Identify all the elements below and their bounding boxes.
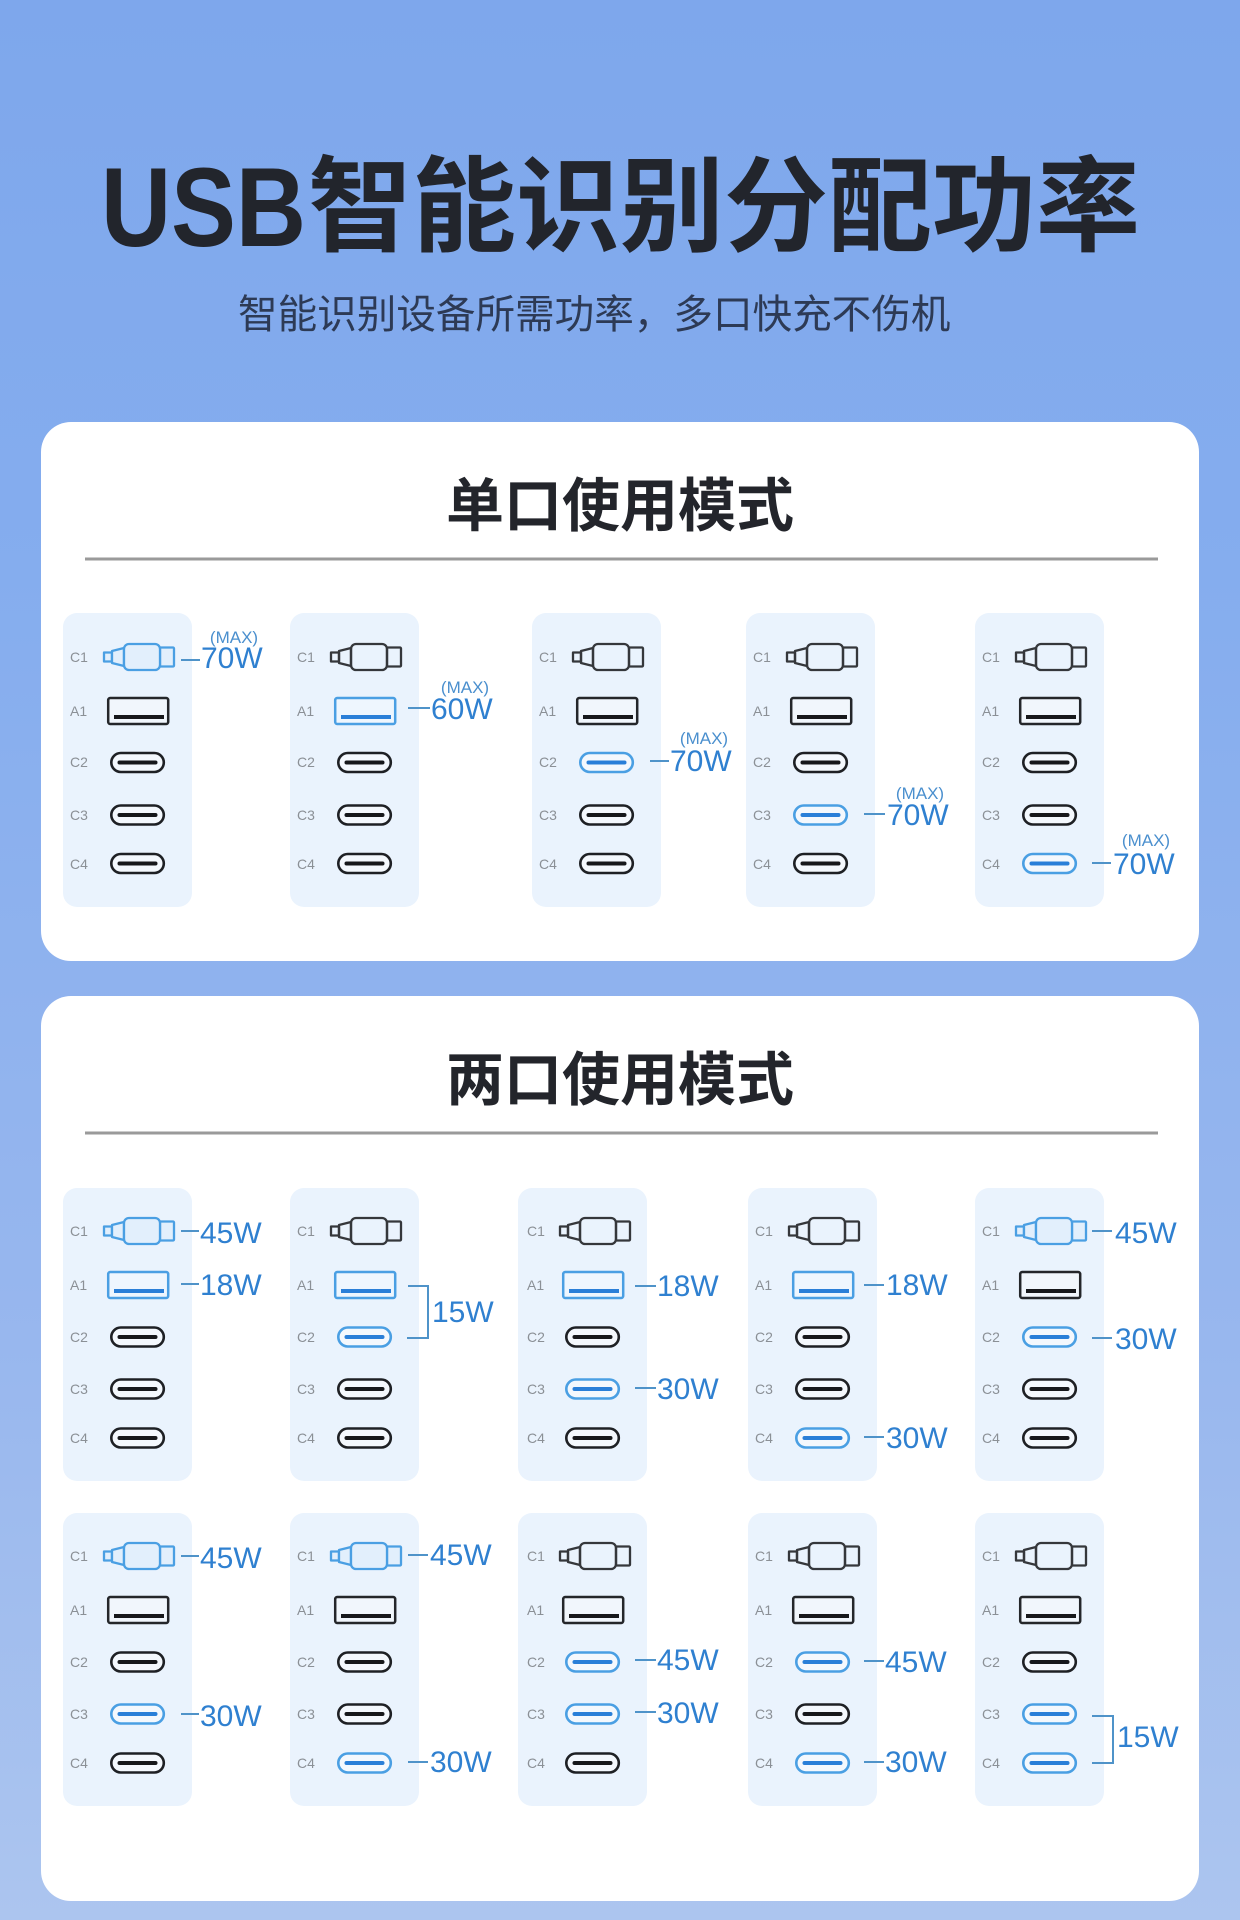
- icon: C4: [794, 854, 847, 873]
- port names: C1: [70, 1223, 88, 1239]
- icon: C3: [796, 1704, 849, 1724]
- port names: C3: [982, 1381, 1000, 1397]
- icon: C1 active: [104, 1218, 174, 1244]
- icon: C3: [111, 806, 164, 824]
- port panel: C3 70W: [746, 613, 949, 907]
- port names: A1: [297, 1602, 314, 1618]
- icon: C3: [338, 1704, 391, 1724]
- port names: C4: [982, 1755, 1000, 1771]
- port names: C3: [982, 807, 1000, 823]
- power label: 45W: 45W: [430, 1539, 492, 1572]
- port names: C3: [527, 1381, 545, 1397]
- port names: C2: [297, 1329, 315, 1345]
- port panel: C3 + C4 15W: [975, 1513, 1179, 1806]
- icon: C2: [1023, 753, 1076, 772]
- power label: 60W max: 60W: [431, 693, 493, 726]
- divider under heading: [85, 558, 1158, 560]
- icon: C4: [111, 1754, 164, 1772]
- port names: C2: [527, 1654, 545, 1670]
- icon: A1 active: [563, 1272, 623, 1298]
- icon: C4 active: [796, 1428, 849, 1448]
- icon: A1: [1020, 1597, 1080, 1623]
- icon: C2: [338, 753, 391, 772]
- port panel: C2 70W: [532, 613, 732, 907]
- power label: 18W: 18W: [657, 1270, 719, 1303]
- power label: 45W: 45W: [1115, 1217, 1177, 1250]
- port names: A1: [70, 703, 87, 719]
- port names: A1: [70, 1602, 87, 1618]
- port names: A1: [982, 703, 999, 719]
- power label: 70W max: [650, 729, 732, 778]
- port names: C2: [982, 1329, 1000, 1345]
- icon: C2: [796, 1328, 849, 1346]
- port names: C3: [70, 807, 88, 823]
- icon: C1: [331, 644, 401, 670]
- icon: C2: [566, 1328, 619, 1346]
- port panel: A1 18W + C4 30W: [748, 1188, 948, 1481]
- port names: C1: [70, 649, 88, 665]
- icon: A1: [1020, 1272, 1080, 1298]
- power label: 70W max: [864, 784, 949, 832]
- port names: C2: [70, 754, 88, 770]
- port names: C4: [297, 856, 315, 872]
- icon: A1: [1020, 698, 1080, 724]
- icon: C3: [338, 806, 391, 824]
- port names: A1: [70, 1277, 87, 1293]
- icon: C2: [1023, 1652, 1076, 1672]
- icon: C1: [560, 1218, 630, 1244]
- icon: C3: [1023, 1380, 1076, 1398]
- port names: C1: [982, 1548, 1000, 1564]
- port panel: A1 + C2 15W: [290, 1188, 494, 1481]
- power label: shared 15W: 15W: [1117, 1721, 1179, 1754]
- subtitle: 智能识别设备所需功率，多口快充不伤机: [238, 293, 950, 337]
- port names: C1: [753, 649, 771, 665]
- icon: C4 active: [338, 1754, 391, 1772]
- port names: C4: [539, 856, 557, 872]
- icon: C1 active: [104, 644, 174, 670]
- port names: C4: [70, 1430, 88, 1446]
- port names: C1: [755, 1223, 773, 1239]
- power label: 70W max: [1092, 831, 1175, 881]
- port names: C3: [70, 1706, 88, 1722]
- port names: C1: [70, 1548, 88, 1564]
- port names: C2: [753, 754, 771, 770]
- power label: 70W max: (MAX): [210, 628, 258, 647]
- icon: C2: [794, 753, 847, 772]
- icon: C1: [573, 644, 643, 670]
- icon: C3: [580, 806, 633, 824]
- icon: A1: [335, 1597, 395, 1623]
- port panel: C4 70W: [975, 613, 1175, 907]
- port names: A1: [297, 1277, 314, 1293]
- port names: C1: [755, 1548, 773, 1564]
- port names: C1: [982, 1223, 1000, 1239]
- icon: C1 active: [331, 1543, 401, 1569]
- port panel: C1 70W: [63, 613, 263, 907]
- port names: C4: [755, 1755, 773, 1771]
- panel: two port mode card: [41, 996, 1199, 1901]
- icon: A1 active: [793, 1272, 853, 1298]
- port panel: A1 18W + C3 30W: [518, 1188, 719, 1481]
- power label: 30W: 30W: [886, 1422, 948, 1455]
- icon: C4: [1023, 1428, 1076, 1448]
- power label: shared 15W: [407, 1286, 494, 1338]
- port names: C1: [527, 1223, 545, 1239]
- power label: 45W: 45W: [657, 1644, 719, 1677]
- power label: 70W max: 70W: [1113, 848, 1175, 881]
- port names: C2: [297, 754, 315, 770]
- port names: C4: [753, 856, 771, 872]
- icon: C3 active: [1023, 1704, 1076, 1724]
- port names: C4: [982, 856, 1000, 872]
- port names: A1: [527, 1602, 544, 1618]
- port names: C3: [527, 1706, 545, 1722]
- panel: single port mode card: [41, 422, 1199, 961]
- port names: A1: [755, 1277, 772, 1293]
- power label: 60W max: (MAX): [441, 678, 489, 697]
- title: USB: [101, 145, 306, 270]
- port names: C4: [982, 1430, 1000, 1446]
- port panel: C1 45W + C3 30W: [63, 1513, 262, 1806]
- icon: C3 active: [111, 1704, 164, 1724]
- port names: C1: [297, 1548, 315, 1564]
- heading: single port mode: 单口使用模式: [446, 474, 794, 539]
- port names: C2: [755, 1329, 773, 1345]
- icon: C2: [111, 1652, 164, 1672]
- port panel: C2 45W + C4 30W: [748, 1513, 947, 1806]
- port names: C1: [297, 649, 315, 665]
- icon: C1: [1016, 1543, 1086, 1569]
- icon: C2 active: [580, 753, 633, 772]
- heading: two port mode: 两口使用模式: [446, 1048, 794, 1113]
- port names: C1: [527, 1548, 545, 1564]
- port names: A1: [297, 703, 314, 719]
- port names: C4: [297, 1755, 315, 1771]
- icon: C2 active: [566, 1652, 619, 1672]
- icon: A1: [108, 698, 168, 724]
- icon: C3: [338, 1380, 391, 1398]
- port names: A1: [753, 703, 770, 719]
- port panel: C1 45W + A1 18W: [63, 1188, 262, 1481]
- power label: shared 15W: 15W: [432, 1296, 494, 1329]
- port names: C2: [982, 754, 1000, 770]
- power label: 45W: 45W: [200, 1542, 262, 1575]
- port names: A1: [982, 1602, 999, 1618]
- port names: C2: [70, 1654, 88, 1670]
- port names: C3: [297, 1706, 315, 1722]
- icon: A1: [793, 1597, 853, 1623]
- icon: C4: [580, 854, 633, 873]
- port names: C3: [70, 1381, 88, 1397]
- icon: A1 active: [335, 698, 395, 724]
- power label: 60W max: [408, 678, 493, 726]
- port names: A1: [527, 1277, 544, 1293]
- power label: 45W: 45W: [885, 1646, 947, 1679]
- power label: 30W: 30W: [657, 1373, 719, 1406]
- icon: C2 active: [338, 1328, 391, 1346]
- icon: C1: [331, 1218, 401, 1244]
- port names: A1: [982, 1277, 999, 1293]
- icon: C4 active: [796, 1754, 849, 1772]
- icon: A1: [108, 1597, 168, 1623]
- port names: C1: [982, 649, 1000, 665]
- power label: shared 15W: [1092, 1716, 1179, 1763]
- port names: C4: [70, 1755, 88, 1771]
- icon: C4 active: [1023, 854, 1076, 873]
- port panel: C1 45W + C4 30W: [290, 1513, 492, 1806]
- icon: C3 active: [794, 806, 847, 824]
- port names: C4: [297, 1430, 315, 1446]
- icon: C1: [787, 644, 857, 670]
- port names: C4: [527, 1755, 545, 1771]
- icon: C1 active: [1016, 1218, 1086, 1244]
- icon: C4: [111, 1428, 164, 1448]
- icon: C2: [111, 1328, 164, 1346]
- port names: C4: [70, 856, 88, 872]
- port names: C4: [755, 1430, 773, 1446]
- icon: C4: [566, 1428, 619, 1448]
- port names: C2: [755, 1654, 773, 1670]
- icon: A1 active: [108, 1272, 168, 1298]
- icon: C4: [566, 1754, 619, 1772]
- power label: 70W max: 70W: [201, 642, 263, 675]
- icon: C3: [796, 1380, 849, 1398]
- icon: C3 active: [566, 1704, 619, 1724]
- icon: C1 active: [104, 1543, 174, 1569]
- icon: C4 active: [1023, 1754, 1076, 1772]
- icon: C2: [111, 753, 164, 772]
- port names: A1: [539, 703, 556, 719]
- icon: A1: [791, 698, 851, 724]
- icon: C4: [111, 854, 164, 873]
- power label: 70W max: (MAX): [1122, 831, 1170, 850]
- icon: C1: [789, 1543, 859, 1569]
- icon: C2 active: [796, 1652, 849, 1672]
- port names: C2: [539, 754, 557, 770]
- port names: C1: [297, 1223, 315, 1239]
- port names: A1: [755, 1602, 772, 1618]
- icon: C3: [111, 1380, 164, 1398]
- icon: C1: [560, 1543, 630, 1569]
- power label: 30W: 30W: [657, 1697, 719, 1730]
- port names: C3: [982, 1706, 1000, 1722]
- icon: C3 active: [566, 1380, 619, 1398]
- port names: C3: [539, 807, 557, 823]
- power label: 30W: 30W: [1115, 1323, 1177, 1356]
- power label: 18W: 18W: [200, 1269, 262, 1302]
- power label: 70W max: (MAX): [680, 729, 728, 748]
- power label: 70W max: 70W: [670, 745, 732, 778]
- icon: C1: [1016, 644, 1086, 670]
- icon: A1 active: [335, 1272, 395, 1298]
- port names: C3: [297, 1381, 315, 1397]
- icon: C4: [338, 854, 391, 873]
- port names: C1: [539, 649, 557, 665]
- port names: C3: [297, 807, 315, 823]
- port names: C3: [753, 807, 771, 823]
- port names: C2: [70, 1329, 88, 1345]
- port names: C3: [755, 1381, 773, 1397]
- port names: C2: [982, 1654, 1000, 1670]
- port panel: C2 45W + C3 30W: [518, 1513, 719, 1806]
- port names: C4: [527, 1430, 545, 1446]
- power label: 30W: 30W: [885, 1746, 947, 1779]
- icon: A1: [577, 698, 637, 724]
- port names: C2: [297, 1654, 315, 1670]
- port names: C2: [527, 1329, 545, 1345]
- power label: 45W: 45W: [200, 1217, 262, 1250]
- power label: 70W max: [181, 628, 263, 675]
- icon: C2: [338, 1652, 391, 1672]
- icon: C3: [1023, 806, 1076, 824]
- icon: C1: [789, 1218, 859, 1244]
- icon: C4: [338, 1428, 391, 1448]
- port panel: A1 60W: [290, 613, 493, 907]
- divider under heading: [85, 1132, 1158, 1134]
- power label: 70W max: 70W: [887, 799, 949, 832]
- port panel: C1 45W + C2 30W: [975, 1188, 1177, 1481]
- icon: C2 active: [1023, 1328, 1076, 1346]
- power label: 18W: 18W: [886, 1269, 948, 1302]
- power label: 70W max: (MAX): [896, 784, 944, 803]
- icon: A1: [563, 1597, 623, 1623]
- title: 智能识别分配功率: [308, 150, 1140, 266]
- power label: 30W: 30W: [200, 1700, 262, 1733]
- power label: 30W: 30W: [430, 1746, 492, 1779]
- port names: C3: [755, 1706, 773, 1722]
